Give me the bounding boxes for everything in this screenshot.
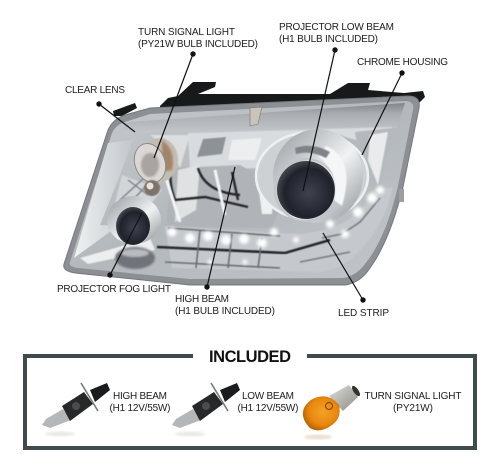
- heading: included: INCLUDED: [209, 348, 291, 366]
- projector low beam: [256, 129, 368, 223]
- text: low beam: (H1 12V/55W): [238, 403, 298, 414]
- callout: high beam: [175, 167, 275, 317]
- callout: projector low beam: PROJECTOR LOW BEAM: [279, 22, 394, 33]
- top chrome band: [120, 103, 405, 133]
- callout: turn signal light: TURN SIGNAL LIGHT: [138, 27, 235, 38]
- callout: LED strip: LED STRIP: [338, 308, 389, 319]
- left reflector panel: [74, 140, 133, 258]
- callout: projector fog light: [57, 213, 171, 295]
- callout: turn signal light: (PY21W BULB INCLUDED): [138, 39, 258, 50]
- callout: chrome housing: CHROME HOUSING: [357, 57, 448, 68]
- text: high beam: [110, 391, 170, 414]
- top clip: [250, 107, 262, 126]
- headlight illustration: [64, 82, 425, 285]
- text: high beam: (H1 12V/55W): [110, 403, 170, 414]
- callout: clear lens: CLEAR LENS: [65, 85, 125, 96]
- callout: turn signal light: [138, 27, 258, 158]
- clear lens body: [70, 101, 413, 279]
- callout: projector low beam: [279, 22, 394, 191]
- projector fog light: [107, 196, 161, 269]
- LED strip: [157, 186, 393, 272]
- panel: included: [25, 348, 475, 448]
- text: high beam: HIGH BEAM: [113, 391, 167, 402]
- turn signal reflector: [129, 138, 178, 196]
- callout: high beam: HIGH BEAM: [175, 294, 229, 305]
- side tab: [399, 189, 404, 202]
- text: turn signal light: TURN SIGNAL LIGHT: [364, 391, 462, 402]
- callout: clear lens: [65, 85, 135, 132]
- icon: high beam bulb: [42, 383, 110, 436]
- callout: projector fog light: PROJECTOR FOG LIGHT: [57, 284, 171, 295]
- housing outline: [64, 96, 419, 285]
- text: turn signal light: [364, 391, 462, 414]
- callout: high beam: (H1 BULB INCLUDED): [175, 306, 275, 317]
- text: turn signal light: (PY21W): [393, 403, 433, 414]
- icon: mounting brackets: [113, 82, 425, 116]
- text: low beam: [238, 391, 298, 414]
- inner reflector details: [80, 127, 392, 264]
- callout: projector low beam: (H1 BULB INCLUDED): [279, 34, 378, 45]
- callout: chrome housing: [357, 57, 448, 155]
- callout: LED strip: [323, 233, 389, 319]
- icon: low beam bulb: [172, 383, 240, 436]
- text: low beam: LOW BEAM: [242, 391, 294, 402]
- icon: turn signal bulb: [303, 385, 361, 440]
